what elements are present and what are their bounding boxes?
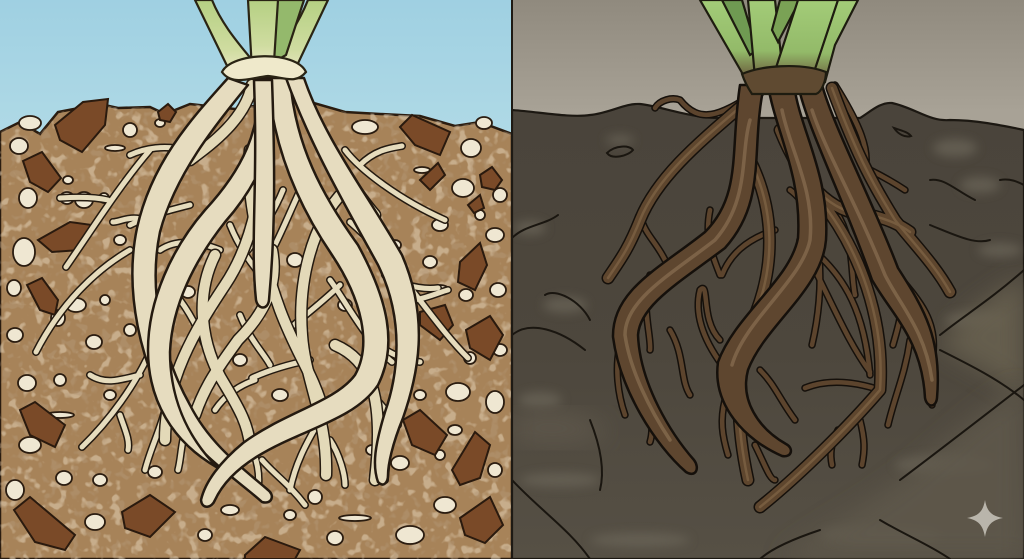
sky <box>0 0 511 132</box>
soil texture <box>0 100 512 559</box>
left panel: healthy soil <box>0 0 512 559</box>
thick tapered roots <box>132 78 419 507</box>
root highlights <box>625 110 932 440</box>
soil cracks and clods <box>512 128 1024 559</box>
pebbles <box>6 116 507 545</box>
healthy roots <box>36 82 468 505</box>
lighter soil ridges <box>940 275 1024 400</box>
soil blotches <box>514 135 1022 547</box>
right panel: rotten soil <box>512 0 1024 559</box>
panel divider <box>511 0 513 559</box>
watermark sparkle <box>967 500 1003 537</box>
backdrop <box>513 0 1024 129</box>
stems: pale green leaves <box>195 0 328 80</box>
thick tapered roots <box>613 85 938 474</box>
stems: green leaves with mud <box>700 0 858 94</box>
rotten roots <box>608 85 950 507</box>
bark chunks <box>14 99 503 559</box>
soil mass <box>0 99 512 559</box>
dark soil mass <box>512 103 1024 559</box>
